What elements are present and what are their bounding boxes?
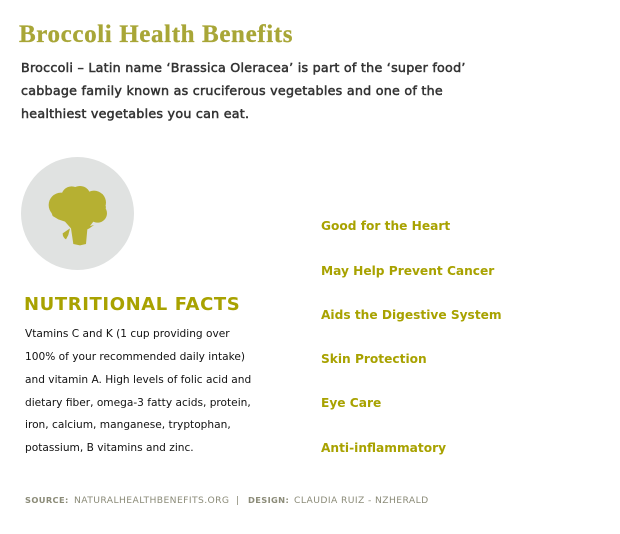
intro text — [21, 60, 466, 121]
intro text: healthiest vegetables you can eat. — [21, 106, 249, 121]
icon: broccoli in circle — [21, 157, 134, 270]
nutritional facts text: and vitamin A. High levels of folic acid and — [25, 374, 251, 386]
source footer: DESIGN: — [248, 495, 289, 505]
source footer — [25, 495, 429, 506]
source footer: SOURCE: — [25, 495, 69, 505]
nutritional facts text: 100% of your recommended daily intake) — [25, 351, 245, 363]
source footer: CLAUDIA RUIZ - NZHERALD — [294, 495, 429, 506]
benefit: cancer: May Help Prevent Cancer — [321, 264, 494, 278]
benefit: eye: Eye Care — [321, 396, 381, 410]
source footer: | — [236, 495, 239, 506]
source footer: NATURALHEALTHBENEFITS.ORG — [74, 495, 229, 506]
nutritional facts text: potassium, B vitamins and zinc. — [25, 442, 194, 454]
intro text: Broccoli – Latin name ‘Brassica Oleracea’ is part of the ‘super food’ — [21, 60, 466, 75]
benefit: skin: Skin Protection — [321, 352, 427, 366]
nutritional facts text — [25, 328, 251, 454]
intro text: cabbage family known as cruciferous vegetables and one of the — [21, 83, 443, 98]
title: Broccoli Health Benefits — [19, 21, 293, 48]
benefit: heart: Good for the Heart — [321, 219, 450, 233]
nutritional facts text: dietary fiber, omega-3 fatty acids, protein, — [25, 397, 251, 409]
nutritional facts text: Vtamins C and K (1 cup providing over — [25, 328, 230, 340]
benefit: anti-inflammatory: Anti-inflammatory — [321, 441, 446, 455]
nutritional facts text: iron, calcium, manganese, tryptophan, — [25, 419, 231, 431]
benefit: digestive: Aids the Digestive System — [321, 308, 502, 322]
heading: nutritional facts: NUTRITIONAL FACTS — [24, 294, 240, 315]
